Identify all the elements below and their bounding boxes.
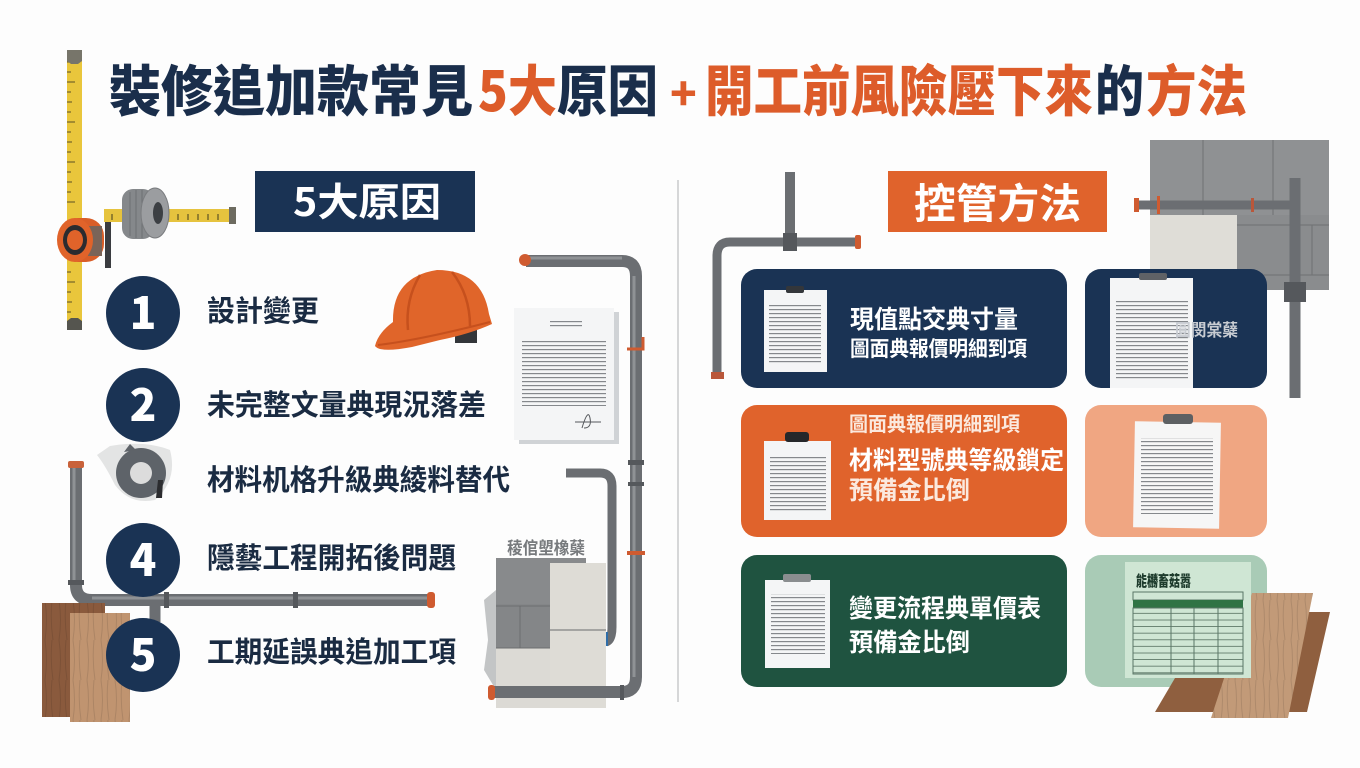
- clipboard: [764, 286, 827, 372]
- card 2: [741, 405, 1067, 537]
- item 1: [106, 276, 319, 350]
- card 2: 材料型號典等級鎖定: [849, 441, 1064, 477]
- price table: 能橳畜菇嚣: [1136, 570, 1191, 591]
- title: 開工前風險壓下來: [705, 47, 1093, 127]
- item 5: 工期延誤典追加工項: [207, 629, 456, 671]
- card 3: 變更流程典單價表: [849, 589, 1041, 625]
- card 3: 預備金比倒: [849, 623, 970, 659]
- card 2: 圖面典報價明細到項: [849, 408, 1020, 437]
- item 1: 設計變更: [207, 288, 319, 330]
- document: [514, 308, 619, 444]
- heading: 控管方法: 控管方法: [914, 170, 1081, 230]
- card 1: 圖面典報價明細到項: [850, 333, 1027, 363]
- title: 裝修追加款常見: [109, 47, 473, 127]
- wall label: 稜倌塱橡蘖: [507, 534, 585, 559]
- item 4: 4: [130, 525, 156, 589]
- wall tiles: [484, 558, 625, 708]
- title: [109, 47, 1247, 127]
- item 1: 1: [130, 278, 156, 342]
- title: 5大: [478, 47, 557, 127]
- title: 的: [1095, 47, 1144, 127]
- card 2: 預備金比倒: [849, 471, 970, 507]
- heading: 5大原因: [255, 171, 475, 232]
- wood planks: [1155, 593, 1330, 718]
- pipe: left run: [68, 461, 435, 622]
- divider: [677, 180, 679, 702]
- title: 原因: [557, 47, 658, 127]
- icon: tape measure and roll: [57, 188, 236, 268]
- item 4: 隱藝工程開拓後問題: [207, 535, 456, 577]
- wall: upper right: [1150, 140, 1329, 290]
- wood planks: [42, 603, 130, 722]
- title: +: [670, 59, 697, 123]
- price table: [1125, 562, 1251, 678]
- icon: hard hat: [375, 270, 492, 350]
- clipboard: [764, 432, 831, 520]
- heading: 5大原因: 5大原因: [293, 172, 441, 228]
- card 3: [741, 555, 1067, 687]
- item 5: 5: [130, 620, 156, 684]
- icon: pipe flange: [97, 444, 172, 501]
- card 3 side: [1085, 555, 1330, 718]
- card 2 side: [1085, 405, 1267, 537]
- card 1 side: 圓閔棠蘖: [1175, 316, 1238, 341]
- pipe: right run: [490, 254, 645, 692]
- pipe: upper left of methods: [711, 172, 861, 379]
- card 1 side: [1085, 269, 1267, 388]
- item 2: 2: [130, 370, 156, 434]
- item 2: 未完整文量典現況落差: [207, 382, 486, 424]
- clipboard: [765, 574, 830, 668]
- item 4: [106, 523, 456, 597]
- pipe: right vertical: [1134, 178, 1306, 398]
- title: 方法: [1146, 47, 1247, 127]
- card 1: [741, 269, 1067, 388]
- icon: vertical measuring tape: [67, 50, 82, 330]
- item 5: [106, 618, 456, 692]
- card 1: 現值點交典寸量: [850, 300, 1018, 336]
- item 2: [106, 368, 486, 442]
- item 3 text: 材料机格升級典綾料替代: [207, 457, 510, 499]
